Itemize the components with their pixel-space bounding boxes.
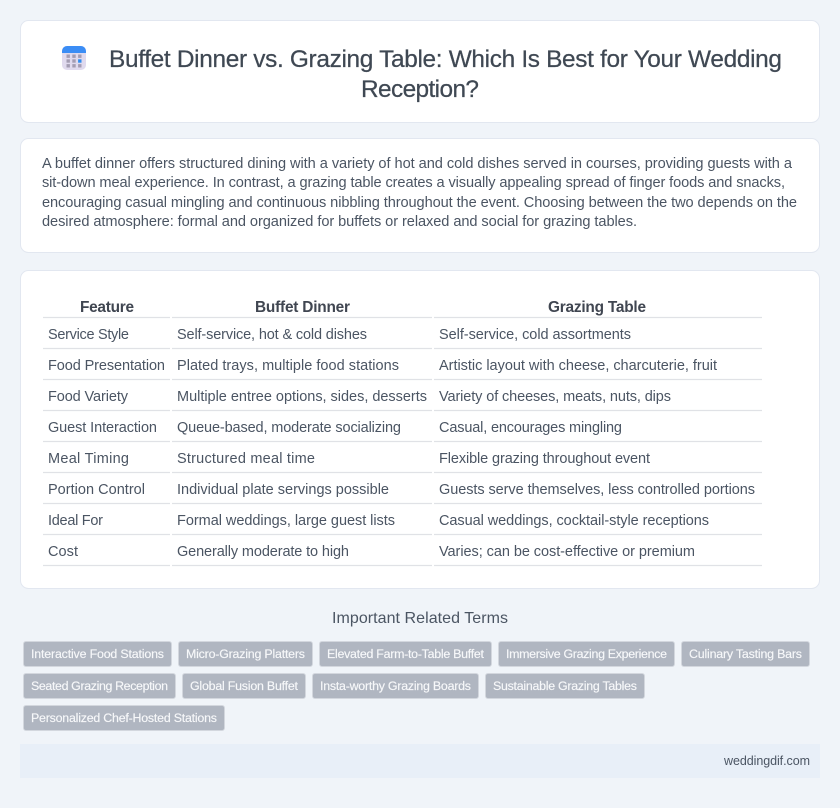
icon: calendar (62, 46, 86, 70)
tag (312, 674, 478, 698)
table row: service style (48, 327, 631, 343)
panel: title card (20, 20, 820, 122)
table row: ideal for: Casual weddings, cocktail-style receptions (439, 513, 709, 529)
tag: Culinary Tasting Bars (689, 647, 802, 661)
tag: Interactive Food Stations (31, 647, 164, 661)
table row: ideal for (48, 513, 709, 529)
table row: portion control (48, 482, 755, 498)
tag (24, 674, 176, 698)
table row: food variety: Multiple entree options, sides, desserts (177, 389, 427, 405)
title: Buffet Dinner vs. Grazing Table: Which Is Best for Your Wedding (109, 46, 782, 73)
table header: Grazing Table (548, 299, 646, 316)
table row: meal timing: Structured meal time (177, 451, 315, 467)
table row: food variety: Food Variety (48, 389, 129, 405)
footer (20, 744, 820, 778)
table header: Buffet Dinner (255, 299, 350, 316)
table header: Feature (80, 299, 134, 316)
heading: related terms: Important Related Terms (332, 610, 508, 627)
tag (320, 642, 492, 666)
table row: guest interaction: Casual, encourages mingling (439, 420, 622, 436)
table row: cost: Generally moderate to high (177, 544, 349, 560)
text block: introduction: A buffet dinner offers structured dining with a variety of hot and cold dishes served in courses, providing guests with a (42, 156, 793, 172)
table row: portion control: Guests serve themselves, less controlled portions (439, 482, 755, 498)
table row: food presentation (48, 358, 717, 374)
tag: Elevated Farm-to-Table Buffet (327, 647, 485, 661)
tag: Immersive Grazing Experience (506, 647, 667, 661)
tag: Sustainable Grazing Tables (493, 679, 637, 693)
table row: guest interaction: Queue-based, moderate socializing (177, 420, 401, 436)
tag (498, 642, 674, 666)
table row: food presentation: Plated trays, multiple food stations (177, 358, 399, 374)
table row: portion control: Portion Control (48, 482, 145, 498)
footer: weddingdif.com (723, 754, 810, 768)
tag: Global Fusion Buffet (190, 679, 299, 693)
table row: cost: Cost (48, 544, 78, 560)
text block: introduction: encouraging casual mingling and continuous nibbling throughout the event. Choosing between the two depends on the (42, 195, 797, 211)
panel: comparison table (20, 270, 820, 588)
table row: portion control: Individual plate servings possible (177, 482, 389, 498)
tag (182, 674, 306, 698)
table row: cost (48, 544, 695, 560)
tag: Personalized Chef-Hosted Stations (31, 711, 217, 725)
table row: food variety (48, 389, 671, 405)
table row: cost: Varies; can be cost-effective or premium (439, 544, 695, 560)
text block: introduction: sit-down meal experience. In contrast, a grazing table creates a visually appealing spread of finger foods and snacks, (42, 175, 785, 191)
related term tags (24, 642, 810, 730)
table row: guest interaction: Guest Interaction (48, 420, 157, 436)
tag (24, 642, 172, 666)
tag (486, 674, 644, 698)
text block: introduction: desired atmosphere: formal and organized for buffets or relaxed and social for grazing tables. (42, 214, 637, 230)
panel: introduction (20, 138, 820, 252)
tag: Seated Grazing Reception (31, 679, 168, 693)
table row: service style: Service Style (48, 327, 129, 343)
tag: Insta-worthy Grazing Boards (320, 679, 471, 693)
table row: service style: Self-service, hot & cold dishes (177, 327, 367, 343)
table row: meal timing (48, 451, 650, 467)
title (109, 46, 782, 103)
tag (24, 706, 224, 730)
table row: food presentation: Food Presentation (48, 358, 165, 374)
table row: food presentation: Artistic layout with cheese, charcuterie, fruit (439, 358, 717, 374)
table row: ideal for: Ideal For (48, 513, 103, 529)
tag: Micro-Grazing Platters (186, 647, 305, 661)
table row: meal timing: Flexible grazing throughout event (439, 451, 650, 467)
title: Reception? (361, 76, 479, 103)
table row: service style: Self-service, cold assortments (439, 327, 631, 343)
table row: ideal for: Formal weddings, large guest lists (177, 513, 395, 529)
table header (80, 299, 646, 316)
table row: food variety: Variety of cheeses, meats, nuts, dips (439, 389, 671, 405)
tag (682, 642, 810, 666)
table row: meal timing: Meal Timing (48, 451, 129, 467)
text block: introduction (42, 156, 797, 230)
table row: guest interaction (48, 420, 622, 436)
tag (178, 642, 312, 666)
